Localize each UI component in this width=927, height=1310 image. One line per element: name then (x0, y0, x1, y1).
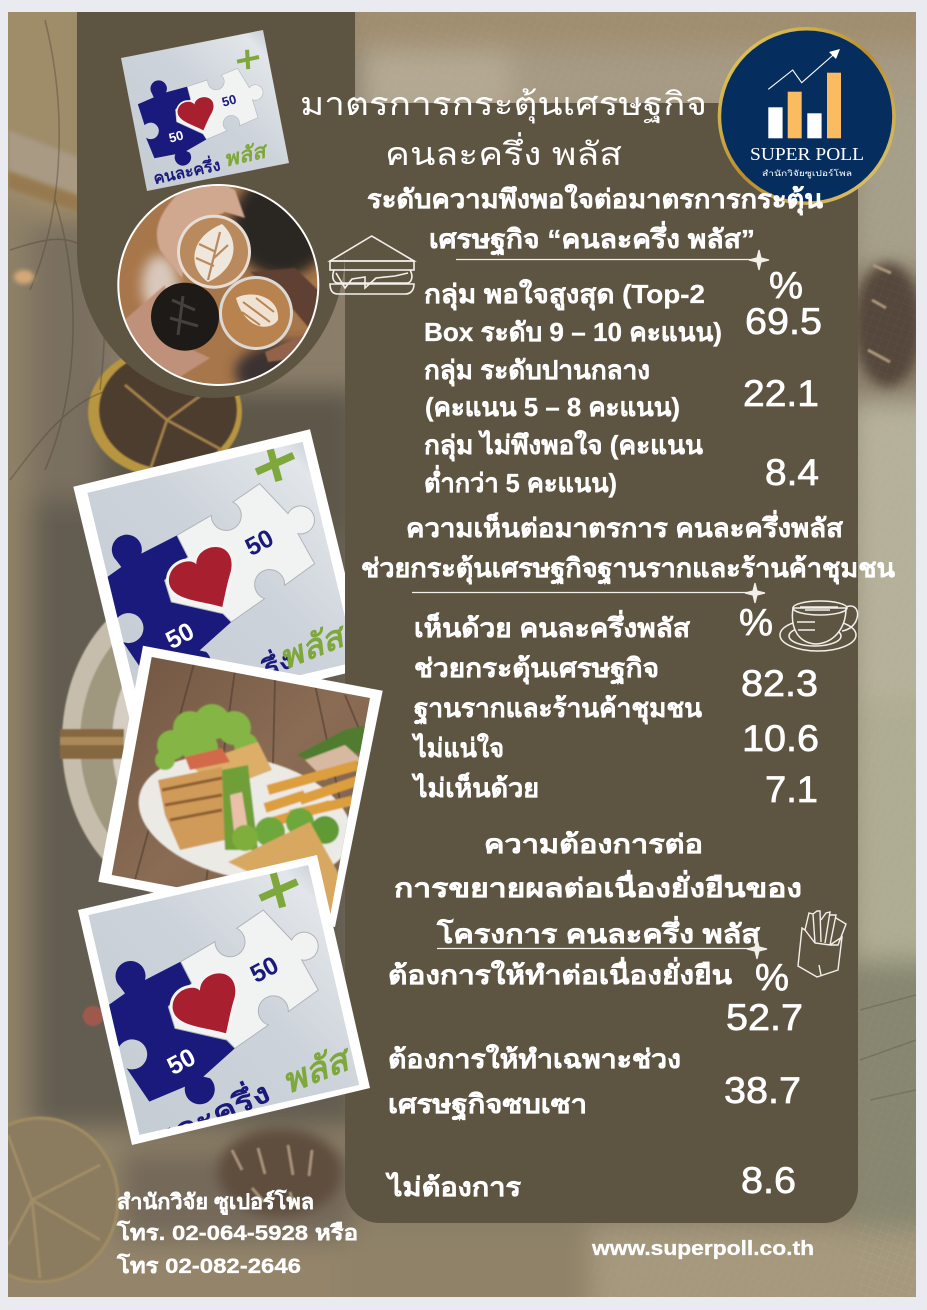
row: only during slowdown: เศรษฐกิจซบเซา (388, 1089, 587, 1122)
row: top-2 box: กลุ่ม พอใจสูงสุด (Top-2 (424, 279, 705, 311)
row: only during slowdown: ต้องการให้ทำเฉพาะช่วง (388, 1044, 681, 1074)
photo frame: kon la khrueng plus logo (middle): คนละครึ่ง (175, 642, 297, 720)
background: ceramic plate (59, 620, 154, 893)
row: agree (414, 609, 702, 726)
footer: contact: โทร 02-082-2646 (116, 1253, 301, 1278)
heading: desire to extend (394, 829, 802, 949)
value 8.4: 8.4 (765, 452, 819, 493)
extension table (385, 956, 803, 1202)
logo: Super Poll: SUPER POLL (750, 144, 864, 164)
row: agree: ฐานรากและร้านค้าชุมชน (414, 693, 702, 726)
satisfaction table (424, 265, 822, 498)
value 8.6: 8.6 (741, 1160, 796, 1201)
logo card: kon la khrueng plus (top): คนละครึ่ง (151, 153, 222, 188)
heading: desire to extend: โครงการ คนละครึ่ง พลัส (436, 915, 760, 949)
panel: left rounded header (77, 12, 355, 398)
row: agree: ช่วยกระตุ้นเศรษฐกิจ (414, 653, 659, 686)
heading: satisfaction level: เศรษฐกิจ “คนละครึ่ง พลัส” (429, 220, 755, 257)
divider with sparkle 1 (456, 250, 769, 270)
logo: Super Poll: สำนักวิจัยซูเปอร์โพล (762, 168, 852, 179)
value 52.7: 52.7 (726, 997, 803, 1038)
row: only during slowdown (388, 1044, 681, 1122)
row: top-2 box: Box ระดับ 9 – 10 คะแนน) (424, 317, 722, 347)
photo: coffee cups circle (117, 184, 320, 386)
logo card: kon la khrueng plus (top): 50 (220, 91, 238, 110)
photo frame: kon la khrueng plus logo (middle): 50 (241, 524, 278, 562)
heading: satisfaction level: ระดับความพึงพอใจต่อมาตรการกระตุ้น (367, 184, 823, 216)
opinion table (411, 602, 819, 810)
heading: desire to extend: ความต้องการต่อ (484, 829, 703, 859)
row: not wanted: ไม่ต้องการ (385, 1171, 521, 1202)
row: agree: เห็นด้วย คนละครึ่งพลัส (414, 609, 690, 643)
photo frame: kon la khrueng plus logo (bottom): นละครึ่ง (146, 1072, 275, 1156)
title: มาตรการกระตุ้นเศรษฐกิจ (300, 86, 707, 124)
row: disagree: ไม่เห็นด้วย (411, 772, 539, 803)
photo frame: kon la khrueng plus logo (bottom): 50 (163, 1043, 200, 1081)
value 82.3: 82.3 (741, 663, 818, 704)
icon: french fries (798, 911, 846, 977)
panel: main brown content (345, 103, 858, 1223)
icon: sandwich (330, 236, 414, 294)
photo frame: kon la khrueng plus logo (middle): พลัส (274, 616, 354, 676)
row: unsure: ไม่แน่ใจ (411, 732, 504, 763)
row: dissatisfied: กลุ่ม ไม่พึงพอใจ (คะแนน (424, 429, 703, 462)
logo card: kon la khrueng plus (top): พลัส (221, 139, 272, 172)
heading: opinion on the measure (361, 509, 895, 586)
photo frame: kon la khrueng plus logo (bottom): 50 (246, 951, 283, 989)
row: mid level: (คะแนน 5 – 8 คะแนน) (425, 392, 680, 422)
background: red berry (83, 1006, 103, 1026)
background: dried orange slice (87, 358, 243, 472)
row: dissatisfied (424, 429, 703, 498)
row: mid level (424, 355, 680, 422)
footer: contact: สำนักวิจัย ซูเปอร์โพล (117, 1189, 314, 1216)
photo frame: kon la khrueng plus logo (middle): 50 (161, 617, 199, 655)
photo frame: kon la khrueng plus logo (bottom): พลัส (276, 1039, 359, 1102)
divider with sparkle 3 (437, 939, 767, 959)
value 22.1: 22.1 (743, 373, 819, 414)
row: dissatisfied: ต่ำกว่า 5 คะแนน) (424, 464, 617, 498)
percent header 2: % (739, 602, 773, 644)
value 69.5: 69.5 (745, 301, 822, 342)
value 38.7: 38.7 (724, 1070, 801, 1111)
row: top-2 box (424, 279, 722, 347)
percent header 1: % (769, 265, 803, 307)
percent header 3: % (755, 957, 789, 999)
title (300, 86, 707, 172)
row: continue: ต้องการให้ทำต่อเนื่องยั่งยืน (388, 956, 732, 990)
heading: opinion on the measure: ความเห็นต่อมาตรการ คนละครึ่งพลัส (406, 509, 843, 543)
heading: opinion on the measure: ช่วยกระตุ้นเศรษฐกิจฐานรากและร้านค้าชุมชน (361, 553, 895, 586)
photo frame: kon la khrueng plus logo (bottom) (78, 855, 370, 1156)
value 10.6: 10.6 (742, 718, 819, 759)
logo: Super Poll (718, 27, 896, 205)
icon: bar chart (768, 49, 841, 138)
footer: contact (116, 1189, 358, 1278)
logo card: kon la khrueng plus (top) (121, 30, 289, 191)
background: pinecones (218, 263, 922, 1216)
background: dried orange bottom left (0, 1118, 118, 1282)
heading: desire to extend: การขยายผลต่อเนื่องยั่งยืนของ (394, 869, 802, 903)
photo frame: kon la khrueng plus logo (middle) (73, 429, 368, 725)
divider with sparkle 2 (412, 583, 765, 603)
title: คนละครึ่ง พลัส (385, 132, 622, 172)
heading: satisfaction level (367, 184, 823, 257)
row: mid level: กลุ่ม ระดับปานกลาง (424, 355, 650, 387)
value 7.1: 7.1 (765, 769, 818, 810)
icon: coffee cup (780, 601, 858, 651)
photo frame: sandwich plate (98, 646, 385, 930)
footer: contact: โทร. 02-064-5928 หรือ (116, 1220, 358, 1245)
logo card: kon la khrueng plus (top): 50 (167, 127, 185, 146)
footer: website: www.superpoll.co.th (591, 1238, 814, 1260)
